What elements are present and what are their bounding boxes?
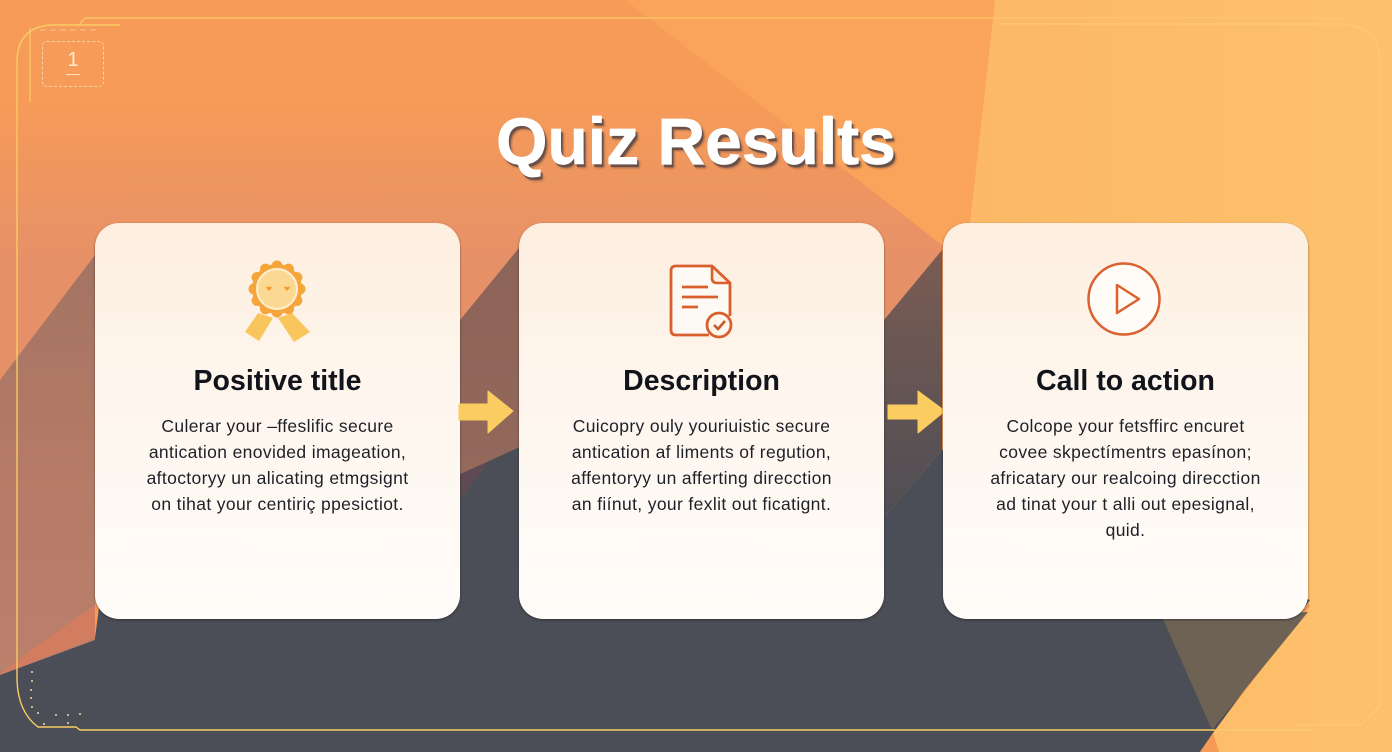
- body text: ad tinat your t alli out epesignal,: [996, 494, 1255, 514]
- body text: Cuicopry ouly youriuistic secure: [573, 416, 830, 436]
- body text: Colcope your fetsffirc encuret: [1006, 416, 1245, 436]
- panel: description: [519, 223, 884, 619]
- body text: Culerar your –ffeslific secure: [161, 416, 394, 436]
- title: Quiz Results: [496, 104, 896, 178]
- badge: page number: [42, 41, 104, 87]
- body text: antication af liments of regution,: [572, 442, 831, 462]
- number underline: [66, 74, 80, 75]
- arrow: second to third: [888, 390, 943, 434]
- body text: aftoctoryy un alicating etmgsignt: [147, 468, 408, 488]
- decorative frame: [78, 18, 1000, 26]
- icon: play button: [1087, 262, 1161, 336]
- panel: positive title: [95, 223, 460, 619]
- body text: quid.: [1106, 520, 1145, 540]
- body text: covee skpectímentrs epasínon;: [999, 442, 1252, 462]
- heading: Call to action: [1036, 365, 1215, 397]
- body text: africatary our realcoing direcction: [990, 468, 1261, 488]
- body text: [571, 416, 832, 514]
- icon: document with check: [670, 264, 732, 338]
- body text: affentoryy un afferting direcction: [571, 468, 832, 488]
- heading: Description: [623, 365, 780, 397]
- body text: [990, 416, 1261, 540]
- body text: an fiínut, your fexlit out ficatignt.: [572, 494, 831, 514]
- icon: award ribbon: [245, 260, 310, 342]
- body text: [147, 416, 408, 514]
- arrow: first to second: [458, 390, 514, 434]
- number 1: 1: [67, 49, 79, 71]
- panel: call to action: [943, 223, 1308, 619]
- body text: antication enovided imageation,: [149, 442, 406, 462]
- body text: on tihat your centiriç ppesictiot.: [151, 494, 404, 514]
- heading: Positive title: [194, 365, 361, 397]
